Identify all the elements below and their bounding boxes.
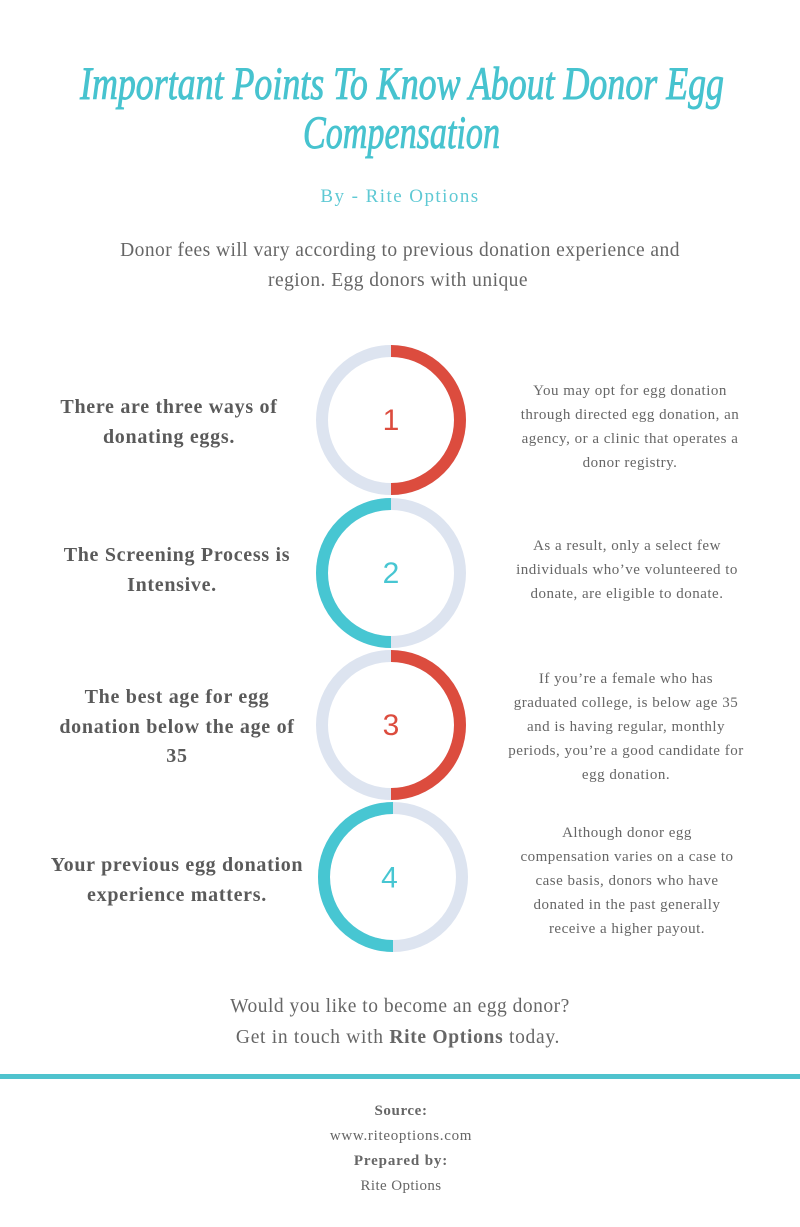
left label 4	[51, 854, 303, 906]
right text 2: As a result, only a select few	[533, 538, 721, 554]
call to action: Would you like to become an egg donor?	[230, 996, 570, 1017]
source text: Source:	[374, 1103, 428, 1119]
left label 3: The best age for egg	[85, 686, 269, 708]
title	[79, 58, 724, 159]
right text 4: case basis, donors who have	[535, 873, 719, 889]
ring 1	[316, 345, 466, 495]
left label 2	[64, 544, 290, 596]
right text 1: You may opt for egg donation	[533, 383, 727, 399]
left label 2: The Screening Process is	[64, 544, 290, 566]
right text 3: egg donation.	[582, 767, 670, 783]
left label 1: There are three ways of	[60, 396, 278, 418]
right text 3: graduated college, is below age 35	[514, 695, 738, 711]
source text: Rite Options	[360, 1178, 442, 1194]
intro text: Donor fees will vary according to previous donation experience and	[120, 240, 680, 261]
source text: www.riteoptions.com	[330, 1128, 472, 1144]
ring 3	[316, 650, 466, 800]
source text	[330, 1103, 472, 1194]
ring 2	[316, 498, 466, 648]
intro text: region. Egg donors with unique	[268, 270, 528, 291]
call to action: Get in touch with Rite Options today.	[236, 1026, 560, 1048]
right text 4: receive a higher payout.	[549, 921, 705, 937]
title: Compensation	[303, 107, 500, 159]
left label 4: experience matters.	[87, 884, 267, 906]
right text 3: periods, you’re a good candidate for	[508, 743, 744, 759]
left label 3	[59, 686, 295, 767]
right text 2: individuals who’ve volunteered to	[516, 562, 738, 578]
right text 1: through directed egg donation, an	[521, 407, 739, 423]
subtitle: By - Rite Options	[320, 186, 480, 207]
source text: Prepared by:	[354, 1153, 448, 1169]
right text 1: agency, or a clinic that operates a	[522, 431, 738, 447]
right text 3: If you’re a female who has	[539, 671, 713, 687]
left label 4: Your previous egg donation	[51, 854, 303, 876]
left label 1: donating eggs.	[103, 426, 235, 448]
right text 2	[516, 538, 738, 602]
ring 4: 4	[381, 862, 398, 894]
ring 2: 2	[383, 557, 399, 590]
call to action	[230, 996, 570, 1048]
right text 4	[520, 825, 734, 937]
right text 3	[508, 671, 744, 783]
right text 1	[520, 383, 739, 471]
right text 2: donate, are eligible to donate.	[531, 586, 723, 602]
left label 1	[60, 396, 278, 448]
ring 3: 3	[383, 709, 399, 742]
left label 3: 35	[166, 745, 188, 767]
left label 3: donation below the age of	[59, 716, 295, 738]
left label 2: Intensive.	[127, 574, 217, 596]
right text 4: compensation varies on a case to	[520, 849, 734, 865]
footer rule	[0, 1074, 800, 1079]
right text 1: donor registry.	[583, 455, 677, 471]
intro text	[120, 240, 680, 291]
footer panel	[0, 1079, 800, 1227]
right text 3: and is having regular, monthly	[527, 719, 725, 735]
ring 4	[318, 802, 468, 952]
ring 1: 1	[383, 404, 399, 437]
right text 4: Although donor egg	[562, 825, 692, 841]
right text 4: donated in the past generally	[534, 897, 720, 913]
